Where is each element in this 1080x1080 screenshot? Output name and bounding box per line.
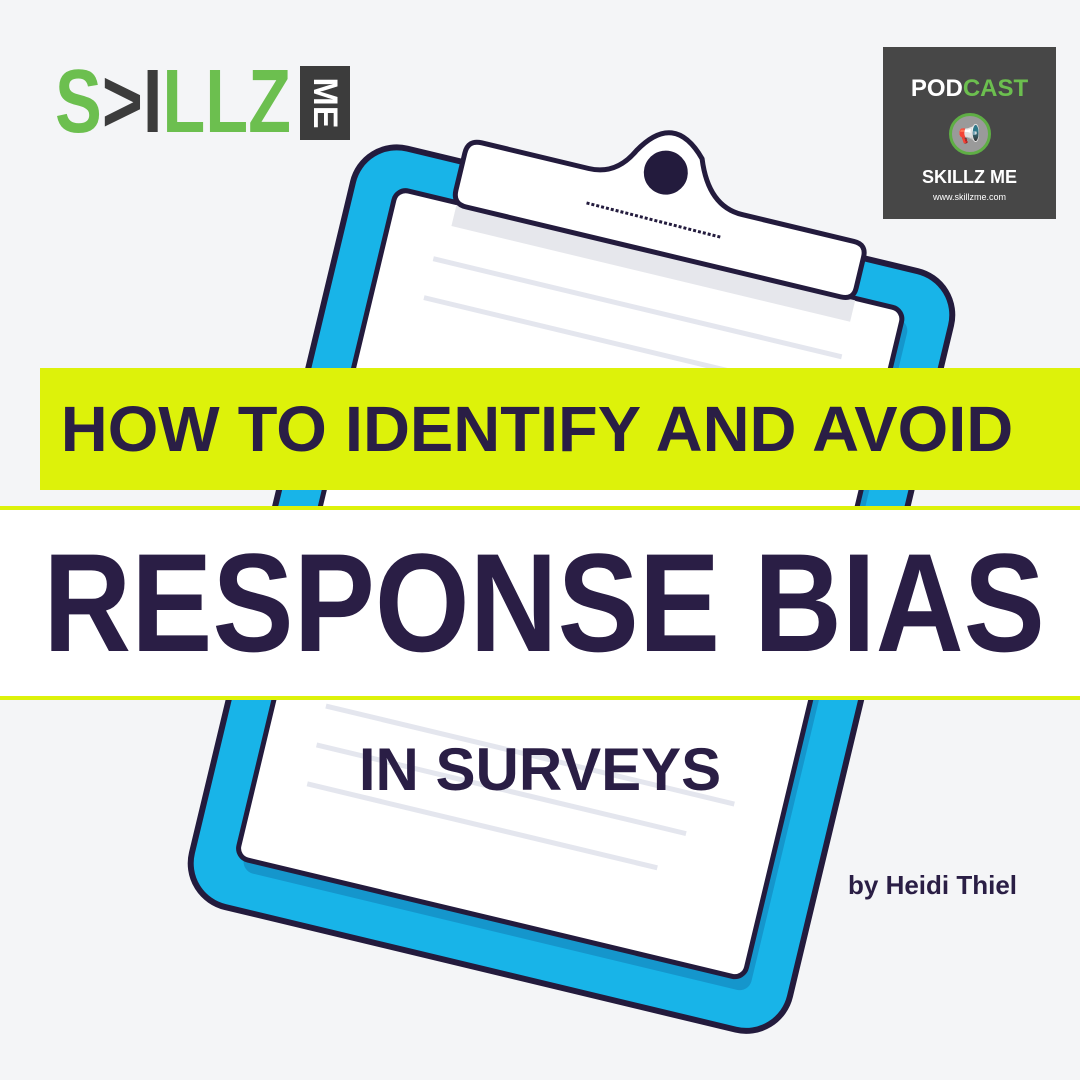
logo: SKILLZ ME: ME xyxy=(306,78,344,128)
subtitle: in surveys: IN SURVEYS xyxy=(359,736,721,803)
icon: megaphone xyxy=(948,113,990,155)
podcast badge xyxy=(883,47,1056,219)
podcast badge: PODCAST xyxy=(911,75,1028,102)
logo: SKILLZ ME: S>ILLZ xyxy=(55,52,291,152)
podcast badge: www.skillzme.com xyxy=(933,192,1006,202)
banner: main title: RESPONSE BIAS xyxy=(43,524,1045,681)
banner: lime subtitle xyxy=(40,368,1080,490)
icon: megaphone: 📢 xyxy=(958,124,981,144)
podcast badge: SKILLZ ME xyxy=(922,167,1017,187)
author: by Heidi Thiel xyxy=(848,870,1017,900)
banner: lime subtitle: HOW TO IDENTIFY AND AVOID xyxy=(61,393,1013,465)
